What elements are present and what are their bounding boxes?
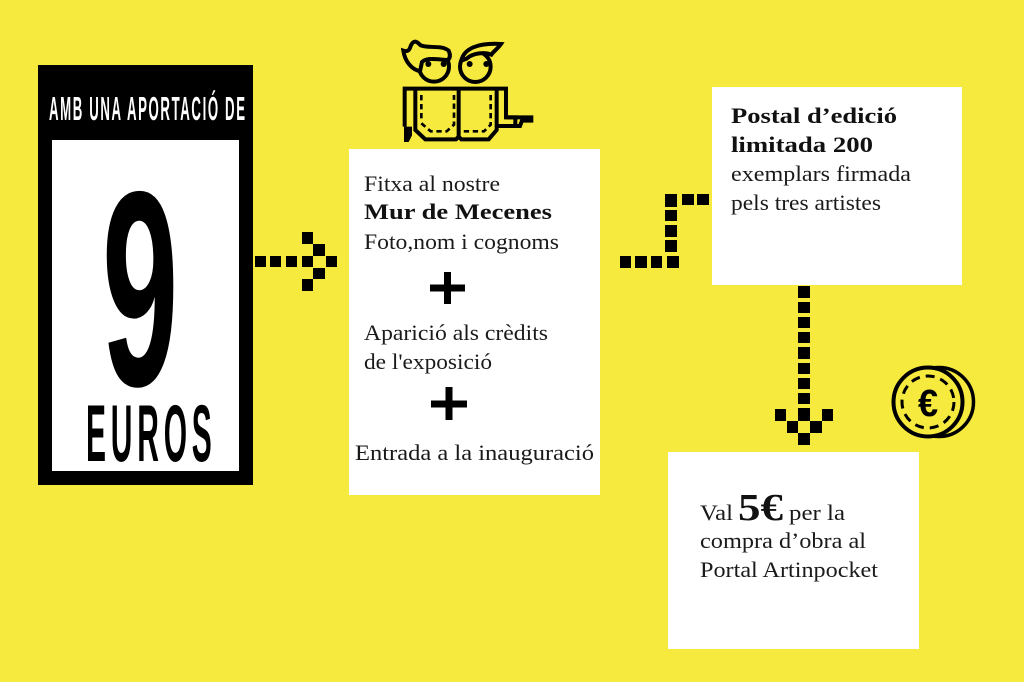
- label: euros: EUROS: [86, 388, 212, 478]
- text: credits: [364, 320, 548, 374]
- arrow: contribution to rewards: [255, 232, 337, 291]
- text: credits: Aparició als crèdits: [364, 320, 548, 345]
- value: 5 euros: 5€: [738, 487, 783, 529]
- big number 9: 9: [102, 135, 178, 445]
- panel: limited edition postcard: [712, 87, 962, 285]
- arrow: rewards to postcard: [620, 194, 709, 268]
- icon: euro coin: €: [918, 381, 938, 424]
- icon: two people reading a book: [403, 42, 531, 142]
- panel: 9 euros contribution: [38, 65, 253, 485]
- panel: voucher: compra d’obra al: [700, 528, 866, 553]
- panel: limited edition postcard: limitada 200: [731, 132, 873, 157]
- text: mural of patrons: Foto,nom i cognoms: [364, 229, 559, 254]
- icon: plus: [431, 387, 467, 420]
- panel: limited edition postcard: Postal d’edició: [731, 103, 897, 128]
- heading: amb una aportació de: AMB UNA APORTACIÓ DE: [49, 88, 245, 128]
- panel: rewards list: [349, 149, 600, 495]
- icon: plus: [430, 272, 465, 304]
- text: opening entry: Entrada a la inauguració: [355, 440, 594, 465]
- panel: voucher: Portal Artinpocket: [700, 557, 878, 582]
- text: mural of patrons: Mur de Mecenes: [364, 199, 553, 224]
- panel: voucher: [668, 452, 919, 649]
- panel: voucher: per la: [789, 500, 845, 525]
- text: mural of patrons: Fitxa al nostre: [364, 171, 500, 196]
- arrow: postcard to voucher: [775, 286, 833, 445]
- icon: euro coin: [894, 368, 974, 436]
- panel: limited edition postcard: pels tres artistes: [731, 190, 881, 215]
- panel: limited edition postcard: exemplars firmada: [731, 161, 911, 186]
- text: mural of patrons: [364, 171, 559, 254]
- panel: voucher: Val: [700, 500, 733, 525]
- text: credits: de l'exposició: [364, 349, 492, 374]
